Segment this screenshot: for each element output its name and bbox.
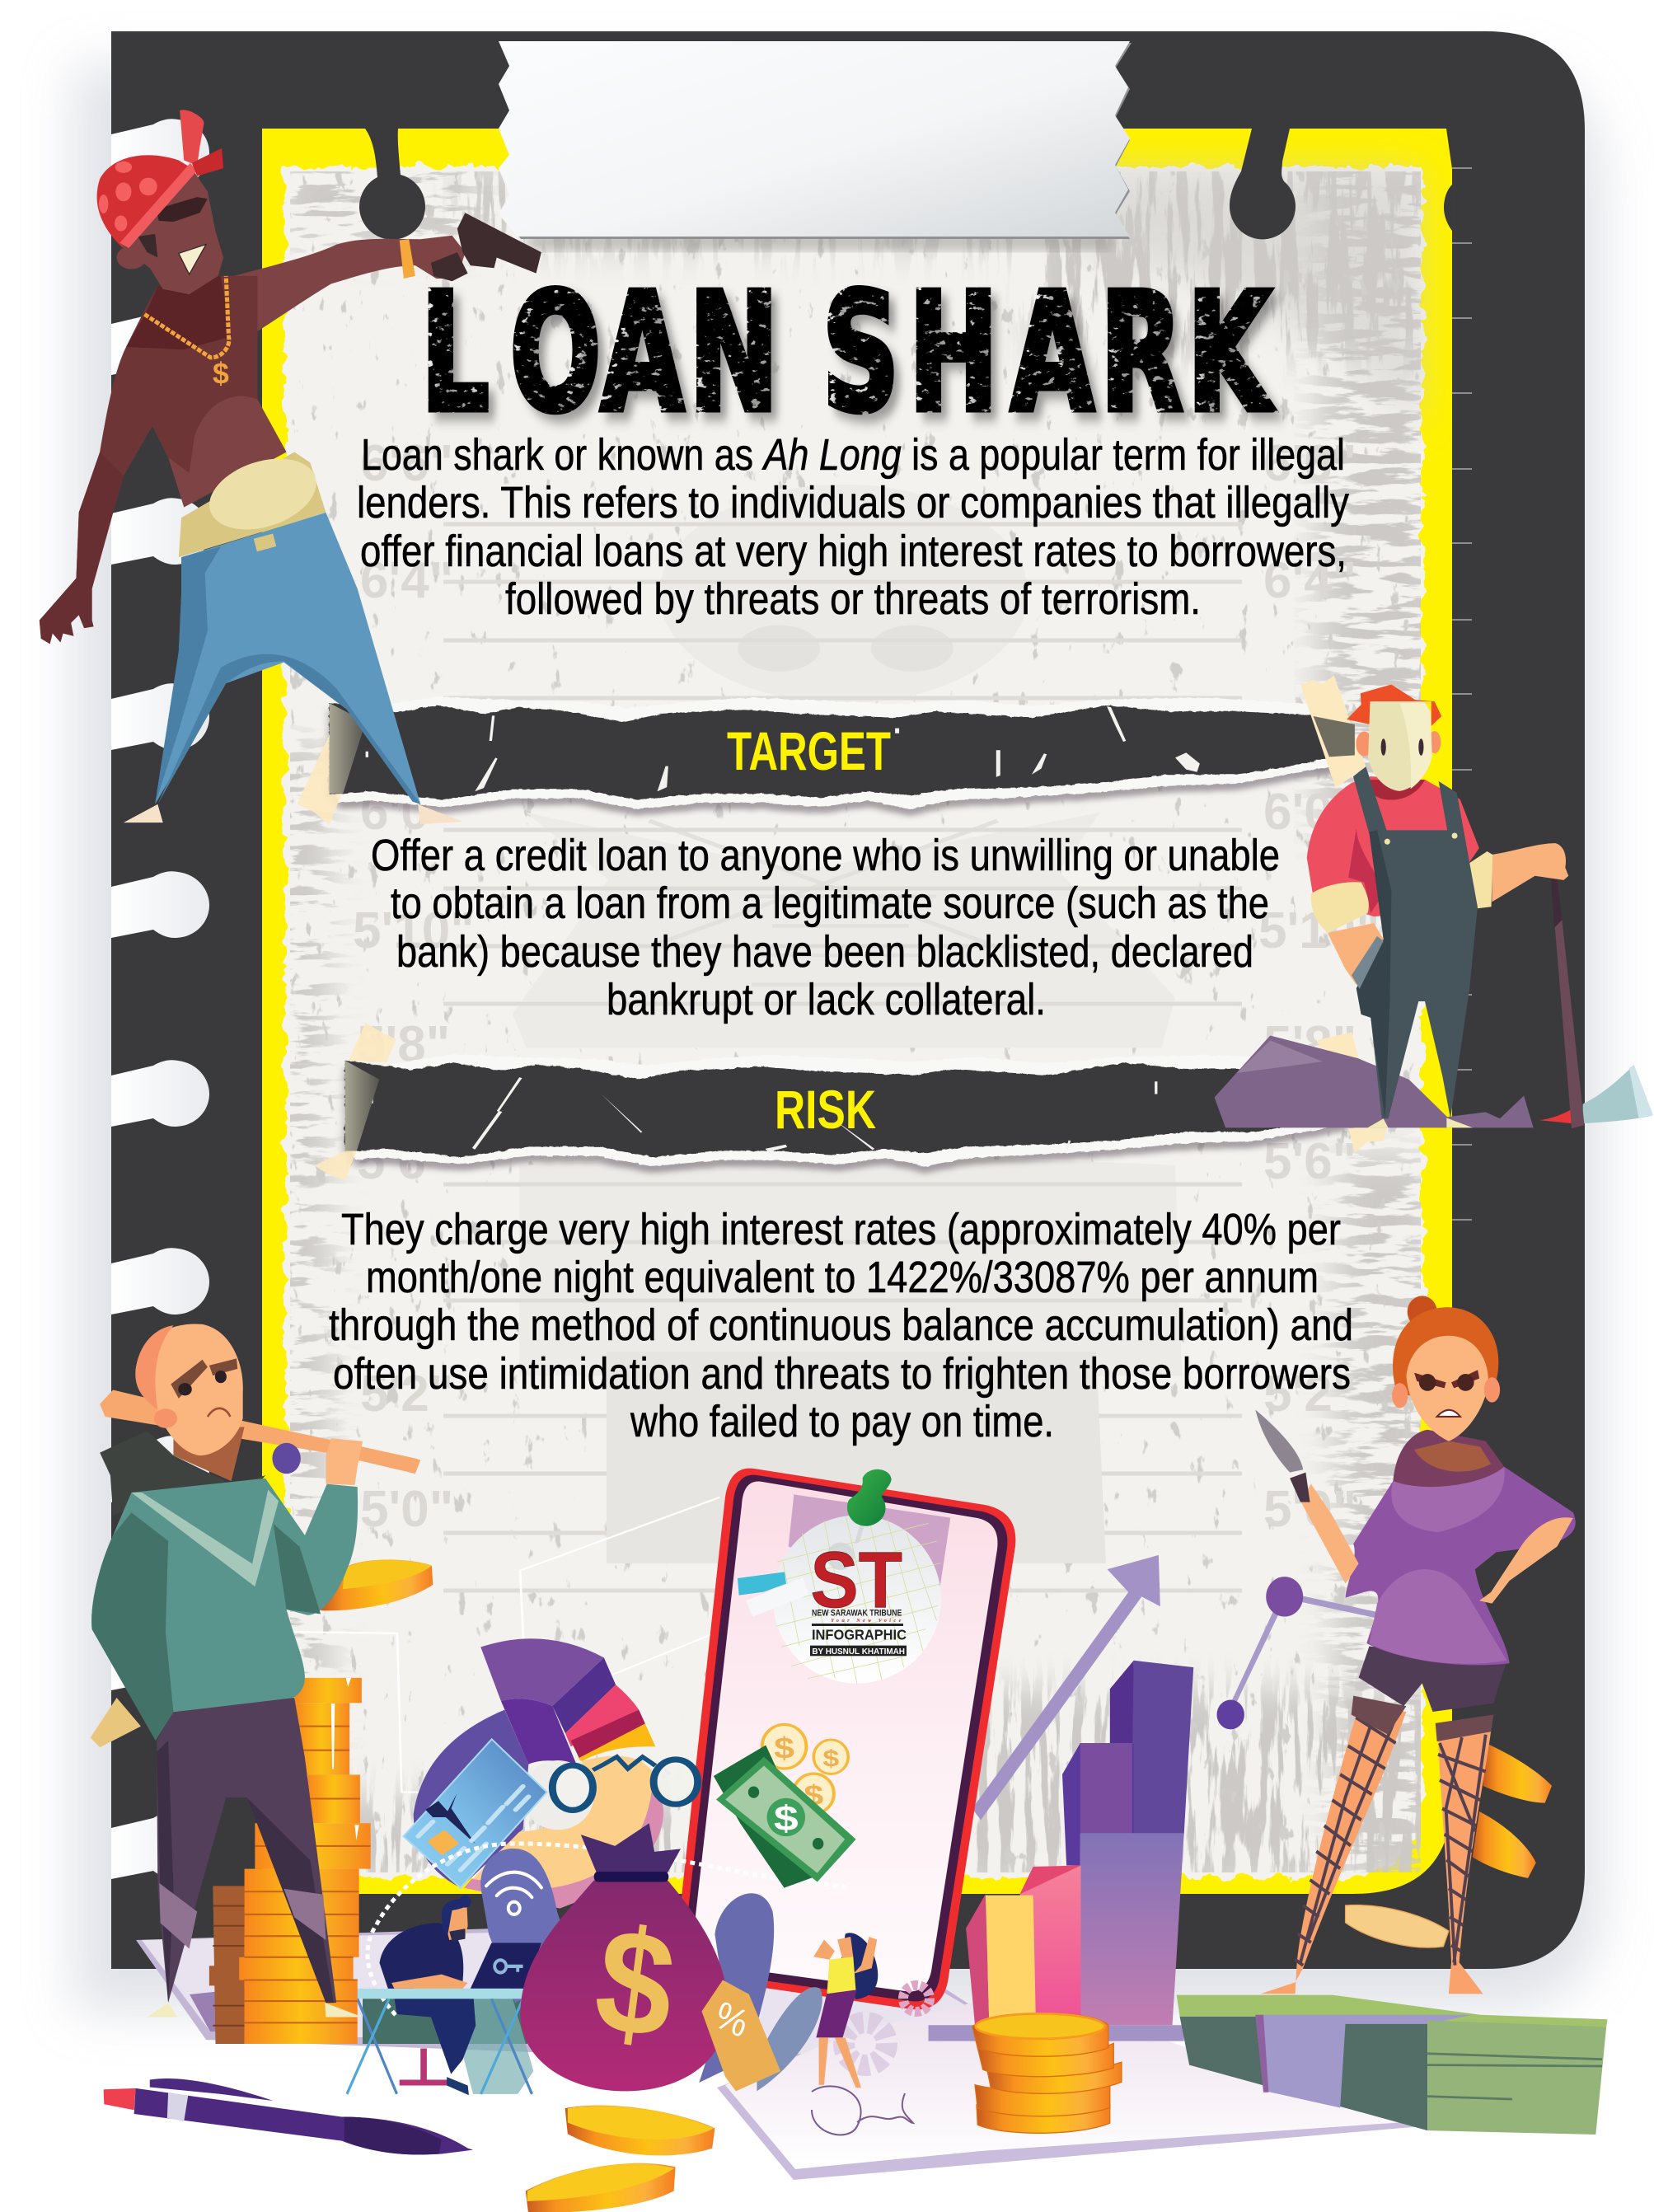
watermark: mugshot height ruler: 5'2" [360, 1366, 453, 1422]
shirt [1307, 776, 1479, 916]
watermark: mugshot height ruler: 6'0" [1263, 784, 1356, 841]
body [40, 236, 465, 644]
text block: definition: offer financial loans at very high interest rates to borrowers, [360, 527, 1347, 576]
gold dollar coins on phone [762, 1724, 848, 1814]
gold dollar coins on phone: $ [822, 1746, 839, 1772]
banknotes: $ [774, 1799, 799, 1839]
torn tape at the top [499, 41, 1132, 251]
money bag: % [710, 1993, 754, 2046]
binder punched holes [359, 129, 1452, 240]
text block: risk description [329, 1205, 1353, 1446]
outstretched arm [1492, 843, 1568, 902]
shoes [148, 2003, 363, 2017]
waistband [179, 452, 326, 557]
panel: notebook binder cover [111, 31, 1585, 1969]
bandana [97, 155, 192, 247]
logo wordmark: BY HUSNUL KHATIMAH [812, 1647, 905, 1657]
watermark: mugshot height ruler: 6'0" [360, 784, 453, 841]
watermark: mugshot height ruler: 6'4" [360, 552, 453, 609]
watermark: mugshot height ruler: 5'2" [1263, 1366, 1356, 1422]
garters [1352, 1696, 1493, 1741]
hand on bat [326, 1438, 363, 1485]
loose gold coins [526, 2106, 715, 2212]
wristband [400, 239, 415, 279]
overalls [1353, 766, 1478, 1118]
text block: risk description: month/one night equivalent to 1422%/33087% per annum [366, 1253, 1319, 1302]
text block: definition [357, 430, 1349, 624]
gears [844, 1985, 930, 2065]
watermark: mugshot height ruler: 6'4" [1263, 552, 1356, 609]
character: gangster with bandana and pistol: $ [213, 358, 229, 391]
handcuffs [552, 1757, 698, 1810]
binder edge ticks [1452, 168, 1472, 1220]
paper grunge: specks [290, 171, 1421, 1872]
rolled sleeve and lower arm [1328, 923, 1384, 985]
stack of green banknotes [1177, 1995, 1607, 2135]
purple plant leaves [699, 1893, 822, 2091]
tiny woman panicking [813, 1933, 878, 2088]
central coin stack [972, 2013, 1122, 2133]
watermark: mugshot height ruler: 5'6" [1263, 1133, 1356, 1190]
title: LOAN SHARK [421, 260, 1273, 448]
shovel [1583, 1065, 1653, 1123]
paper scratches [366, 706, 1200, 791]
logo wordmark: INFOGRAPHIC [812, 1626, 907, 1643]
gold dollar coins on phone: $ [804, 1780, 824, 1811]
paper scratches [369, 1077, 1157, 1152]
neck [173, 1427, 245, 1481]
platform under the scene [136, 1928, 1030, 2064]
text block: definition: lenders. This refers to individuals or companies that illegally [357, 478, 1349, 527]
phone [676, 1469, 1015, 2065]
text block: target description: bankrupt or lack collateral. [607, 975, 1046, 1024]
pen [104, 2078, 473, 2154]
text block: target description [371, 831, 1280, 1024]
logo wordmark: NEW SARAWAK TRIBUNE [812, 1609, 902, 1619]
jeans [155, 513, 420, 804]
head [1393, 1307, 1498, 1404]
spiral binding cut-outs [111, 119, 209, 1879]
paper grunge: right streaks [1304, 171, 1421, 1872]
credit card [404, 1739, 547, 1888]
text block: definition: Loan shark or known as Ah Long is a popular term for illegal [361, 430, 1345, 480]
torn strip [344, 1054, 1349, 1166]
text block: risk description: often use intimidation and threats to frighten those borrowers [333, 1349, 1351, 1399]
panel: yellow frame [262, 129, 1452, 1894]
tape strips on sticker [738, 1572, 786, 1596]
sweater [91, 1479, 358, 1741]
logo sticker [738, 1469, 950, 1684]
necklace [144, 276, 229, 358]
head [122, 168, 223, 294]
chart: coloured 3D bars [929, 1661, 1193, 2041]
text block: risk description: who failed to pay on time. [630, 1397, 1054, 1446]
text block: target description: to obtain a loan from a legitimate source (such as the [391, 879, 1269, 928]
watermark: mugshot height ruler: 6'6" [1263, 435, 1356, 492]
hood [100, 1431, 265, 1516]
signature [812, 2086, 913, 2135]
legs [1261, 1706, 1406, 1994]
shoes [1367, 1118, 1473, 1127]
watermark: mugshot height ruler: 5'8" [357, 1016, 450, 1073]
watermark: mugshot height ruler: 5'0" [360, 1481, 453, 1538]
heading: TARGET: TARGET [727, 720, 891, 781]
coins behind woman [1346, 1743, 1552, 1947]
collar [1393, 1430, 1504, 1487]
green push pin [847, 1469, 892, 1544]
sweater [1346, 1465, 1576, 1665]
dotted orbit line [368, 1844, 849, 2015]
purple wifi blob [480, 1849, 579, 2003]
torn strip [328, 696, 1333, 809]
tape behind [1300, 676, 1366, 788]
watermark: skull and skeleton [513, 485, 1182, 1375]
banknotes [714, 1745, 856, 1888]
watermark: mugshot height ruler: 5'8" [1263, 1016, 1356, 1073]
trousers [157, 1698, 336, 2003]
masking tape on band ends [298, 703, 396, 1180]
document with signature [717, 1990, 1422, 2180]
watermark: mugshot height ruler: 5'6" [357, 1133, 450, 1190]
head and mask [1356, 732, 1373, 757]
hair bun [1408, 1296, 1437, 1328]
coin stack tower behind bald man [209, 1678, 371, 2044]
loose gold coin [321, 1559, 433, 1610]
character: bald man with baseball bat [91, 1324, 420, 2017]
chart: donut with wedges [414, 1638, 663, 1909]
text block: definition: followed by threats or threats of terrorism. [505, 574, 1201, 624]
paper grunge: left streaks [290, 171, 493, 1698]
text block: target description: Offer a credit loan to anyone who is unwilling or unable [371, 831, 1280, 880]
white connector lines [288, 1497, 719, 1793]
fishnet stockings [1296, 1714, 1486, 1966]
knife arm [1300, 1483, 1359, 1583]
panel: RISK torn band [344, 1054, 1349, 1166]
watermark: mugshot height ruler: 5'10" [353, 902, 475, 959]
watermark: mugshot height ruler: 6'6" [360, 435, 453, 492]
bat [100, 1390, 420, 1474]
character: woman with knife [1255, 1296, 1576, 1994]
text block: target description: bank) because they have been blacklisted, declared [396, 927, 1253, 977]
watermark: grey block behind phone [607, 1352, 1106, 1563]
heading: RISK: RISK [775, 1079, 876, 1140]
character: masked worker with shovel [1215, 676, 1653, 1153]
character: gangster with bandana and pistol [40, 110, 541, 824]
pistol [457, 213, 541, 274]
wood piece [91, 1698, 141, 1747]
text block: risk description: They charge very high interest rates (approximately 40% per [341, 1205, 1341, 1254]
money bag: $ [587, 1895, 684, 2071]
percent price tag [701, 1980, 780, 2091]
shorts [1359, 1646, 1506, 1712]
key icon on laptop [494, 1960, 523, 1972]
text block: risk description: through the method of continuous balance accumulation) and [329, 1300, 1353, 1350]
person on laptop at desk [342, 1895, 544, 2095]
logo wordmark: Your New Voice [831, 1619, 902, 1624]
paper grunge: solid corner wash [1071, 169, 1419, 429]
wifi symbol [486, 1872, 541, 1914]
watermark: mugshot height ruler: 5'10" [1258, 902, 1380, 959]
panel: TARGET torn band [328, 696, 1333, 809]
logo wordmark: ST [810, 1536, 902, 1624]
arm on hip [1479, 1517, 1573, 1604]
gold dollar coins on phone: $ [774, 1732, 794, 1764]
head [136, 1324, 243, 1455]
paper grunge: vertical streaks [290, 171, 1421, 1872]
watermark: mugshot height ruler [353, 435, 1380, 1591]
watermark: mugshot height ruler: 5'0" [1263, 1481, 1356, 1538]
panel: torn paper mugshot sheet [285, 166, 1422, 1877]
feet [124, 804, 462, 824]
rock [1215, 1035, 1534, 1127]
chart: rising arrow and network dots [972, 1555, 1377, 1820]
money bag [520, 1823, 780, 2091]
title: LOAN SHARK [428, 268, 1280, 456]
